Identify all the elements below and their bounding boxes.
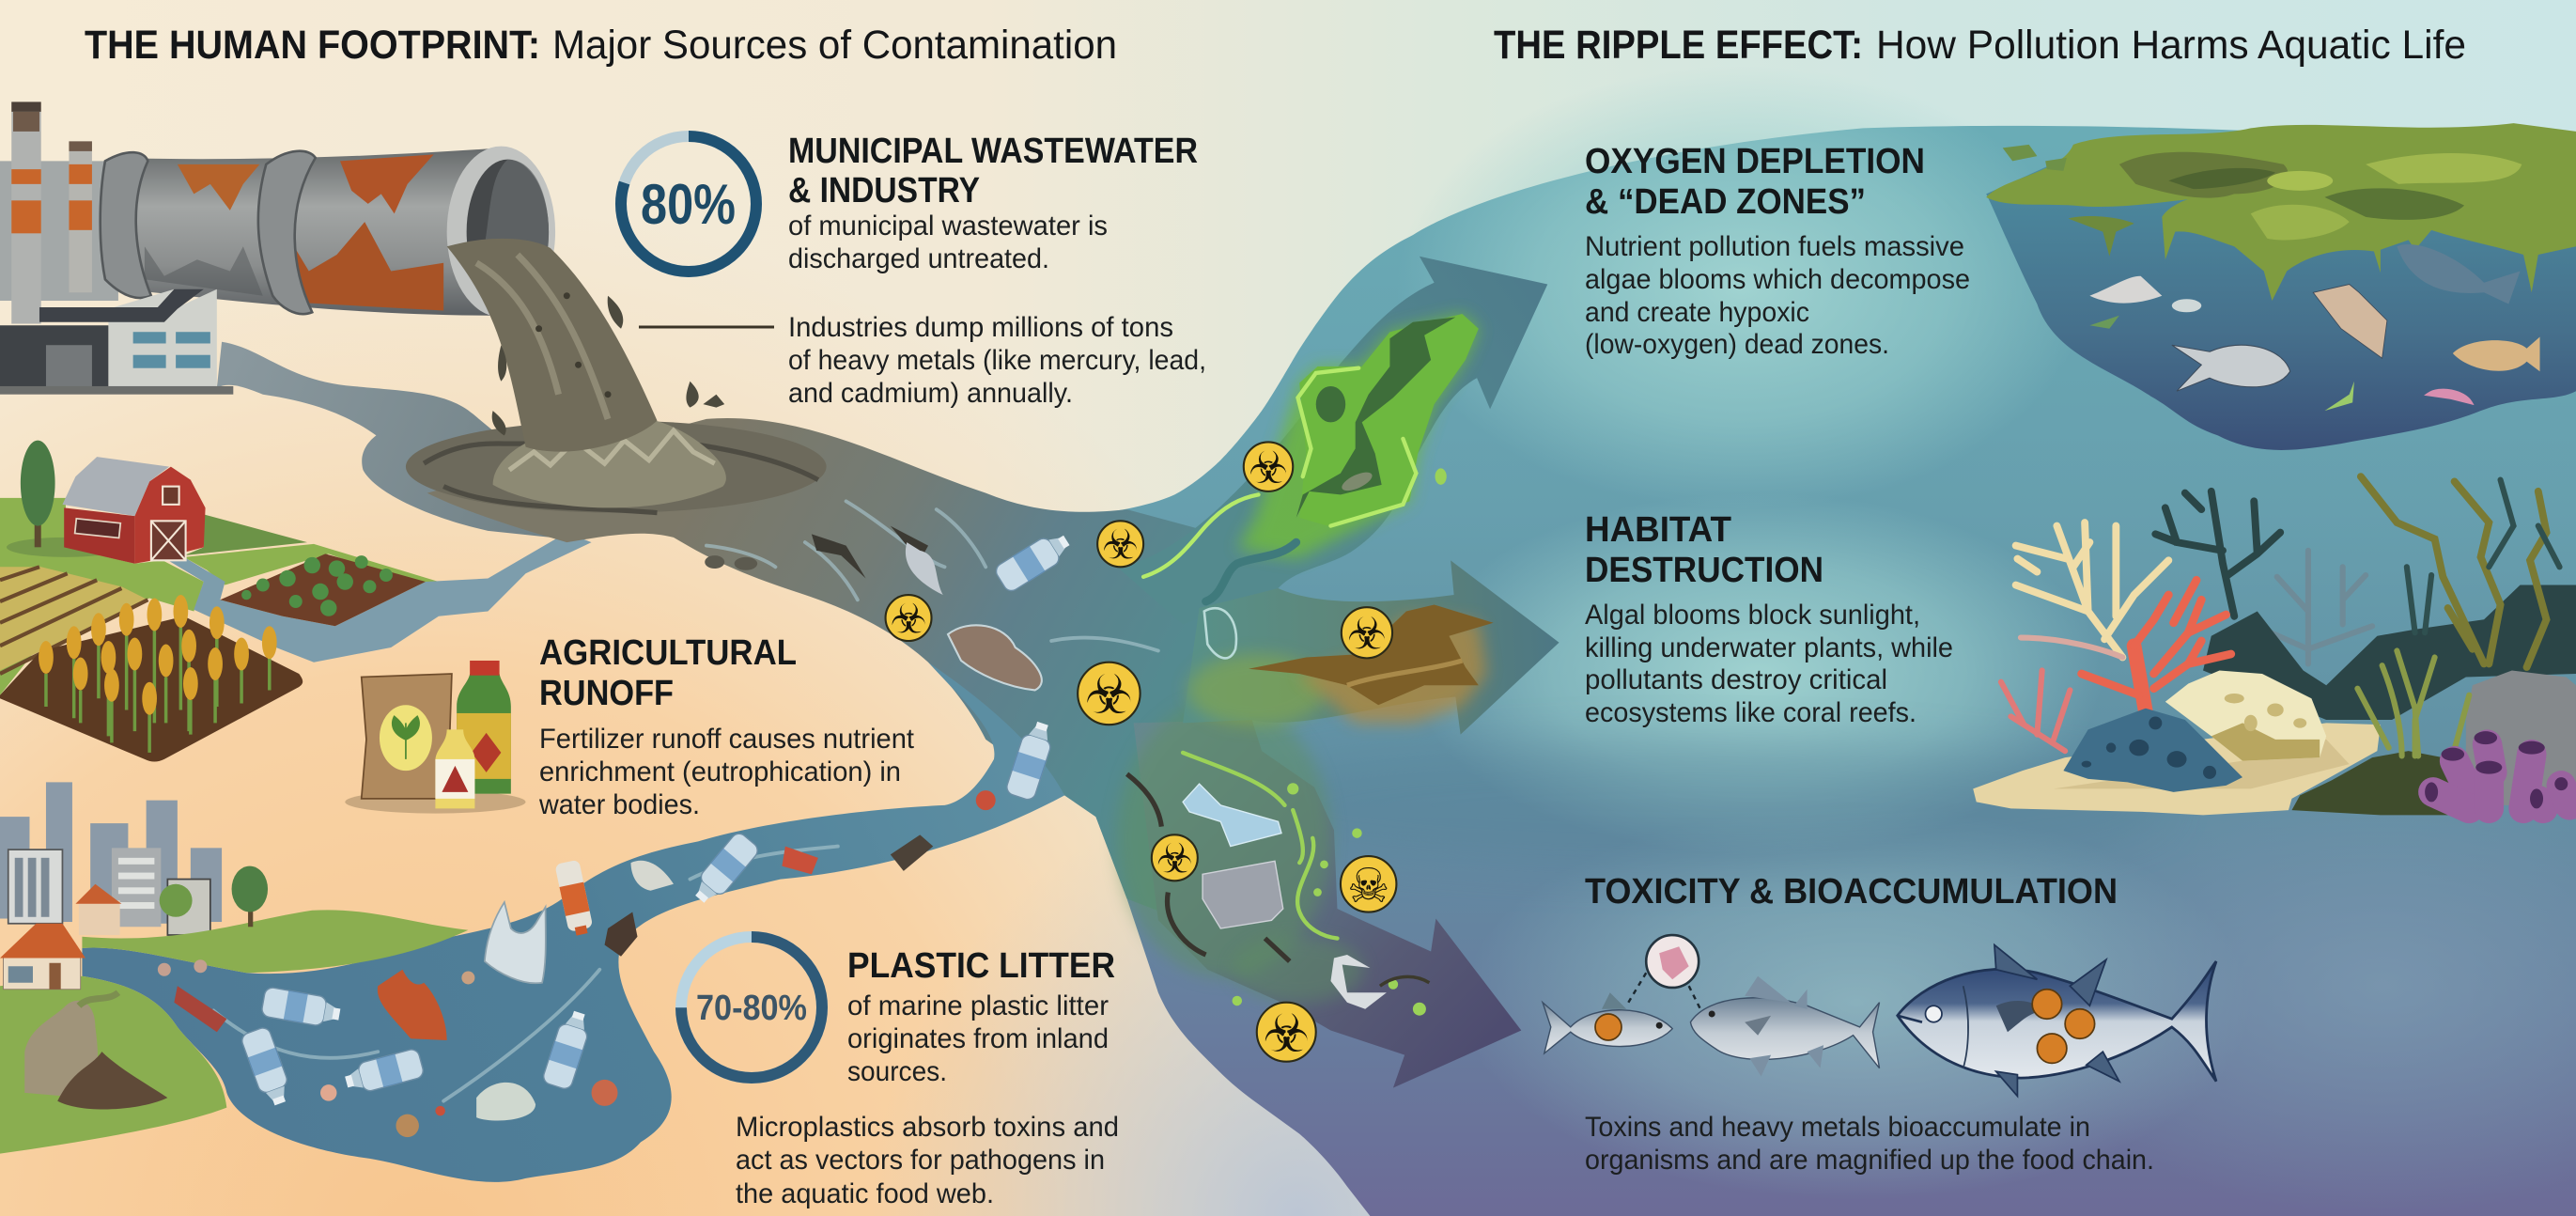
icon: tree [21,441,55,547]
arrow: bottom, to toxicity [1117,698,1521,1088]
text block: agricultural runoff: RUNOFF [539,674,674,713]
dead zone water pocket [1986,156,2576,450]
heading: the human footprint: THE HUMAN FOOTPRINT: [85,23,540,68]
text block: oxygen depletion: OXYGEN DEPLETION [1585,142,1925,181]
text block: agricultural runoff: enrichment (eutrophication) in [539,756,901,787]
biohazard icons: ☠ [1347,858,1389,913]
polluted river delta [427,418,1279,920]
icon: wheat field [0,595,303,762]
small fish [1543,992,1672,1053]
water body: open ocean [985,66,2576,1216]
text block: plastic litter: the aquatic food web. [736,1178,994,1209]
heading: the ripple effect: How Pollution Harms Aquatic Life [1876,23,2466,68]
text block: municipal wastewater and industry: of heavy metals (like mercury, lead, [788,345,1206,376]
arrow: top, to oxygen depletion [1117,257,1547,625]
biohazard icons: ☣ [1156,835,1193,883]
text block: habitat destruction: killing underwater plants, while [1585,632,1953,663]
biohazard icons: ☣ [1263,1004,1310,1065]
algae bloom mat [1986,123,2576,301]
icon: factory [0,101,118,323]
stat ring: 80%: 80% [641,173,736,236]
text block: oxygen depletion: Nutrient pollution fuels massive [1585,231,1964,262]
text block: toxicity and bioaccumulation: Toxins and heavy metals bioaccumulate in [1585,1112,2090,1143]
text block: municipal wastewater and industry: MUNICIPAL WASTEWATER [788,132,1198,171]
flow streaks [213,501,1158,1101]
farm hills [0,498,439,695]
stat ring: 80% [621,136,756,272]
biohazard icons: ☣ [1085,663,1133,726]
text block: municipal wastewater and industry: & INDUSTRY [788,171,980,210]
stat ring: 70-80% [681,937,822,1078]
stream from factory [217,342,566,539]
text block: agricultural runoff [538,633,915,820]
sewage waterfall [447,239,724,452]
plastic river and pond [82,663,1064,1182]
biohazard icons: ☣ [1249,443,1288,494]
stat ring: 70-80%: 70-80% [696,989,807,1028]
farm stream [163,533,592,663]
text block: plastic litter: of marine plastic litter [847,990,1109,1021]
icon: barn [62,457,206,564]
icon: tree and house [0,866,268,990]
biohazard icons [886,442,1396,1065]
text block: habitat destruction: pollutants destroy critical [1585,664,1887,695]
biohazard icons: ☣ [1347,609,1387,661]
text block: oxygen depletion: & “DEAD ZONES” [1585,182,1866,222]
icon: vegetable patch [220,553,426,626]
debris in delta [705,526,1429,1009]
heading: the ripple effect [1494,23,2466,68]
icon: rusty pipe [101,147,555,318]
arrow: middle, to habitat destruction [1183,560,1560,735]
plastic debris [158,719,1057,1137]
green banks [0,910,468,1154]
text block: oxygen depletion [1585,142,1970,360]
text block: habitat destruction: DESTRUCTION [1585,551,1823,590]
text block: toxicity and bioaccumulation [1585,872,2154,1176]
icon: factory buildings [0,289,233,395]
medium fish [1690,976,1880,1076]
food chain fish [1543,935,2216,1096]
icon: fertilizer bag and bottles [345,661,526,814]
biohazard icons: ☣ [890,595,927,643]
icon: city skyline [0,782,222,935]
text block: agricultural runoff: water bodies. [538,789,700,820]
heading: the human footprint: Major Sources of Contamination [552,23,1117,68]
text block: agricultural runoff: AGRICULTURAL [539,633,797,673]
text block: agricultural runoff: Fertilizer runoff causes nutrient [539,724,915,755]
heading: the human footprint [85,23,1117,68]
text block: plastic litter: Microplastics absorb toxins and [736,1112,1119,1143]
text block: habitat destruction: ecosystems like coral reefs. [1585,697,1916,728]
text block: oxygen depletion: algae blooms which decompose [1585,264,1970,295]
text block: municipal wastewater and industry: of municipal wastewater is [788,210,1108,242]
plankton callout [1626,935,1702,1012]
text block: plastic litter: originates from inland [847,1023,1109,1054]
text block: plastic litter: act as vectors for pathogens in [736,1145,1105,1176]
text block: municipal wastewater and industry: Industries dump millions of tons [788,312,1173,343]
dead fish group [2089,244,2540,411]
text block: toxicity and bioaccumulation: TOXICITY & BIOACCUMULATION [1585,872,2118,912]
coral reef [1973,476,2576,815]
icon: striped crop field [0,567,147,674]
large tuna [1898,945,2216,1096]
text block: plastic litter: sources. [847,1056,947,1087]
text block: toxicity and bioaccumulation: organisms and are magnified up the food chain. [1585,1145,2154,1176]
text block: municipal wastewater and industry: discharged untreated. [788,243,1049,274]
text block: habitat destruction [1585,510,1953,728]
sewage pool [406,419,827,513]
biohazard icons: ☣ [1102,522,1139,569]
heading: the ripple effect: THE RIPPLE EFFECT: [1494,23,1863,68]
text block: oxygen depletion: and create hypoxic [1585,297,1809,328]
text block: habitat destruction: Algal blooms block sunlight, [1585,600,1920,631]
text block: plastic litter: PLASTIC LITTER [847,946,1115,986]
text block: habitat destruction: HABITAT [1585,510,1731,550]
text block: municipal wastewater and industry [639,132,1206,409]
text block: municipal wastewater and industry: and cadmium) annually. [788,378,1073,409]
text block: oxygen depletion: (low-oxygen) dead zones. [1585,329,1889,360]
text block: plastic litter [736,946,1119,1209]
icon: trash pile [24,992,167,1110]
